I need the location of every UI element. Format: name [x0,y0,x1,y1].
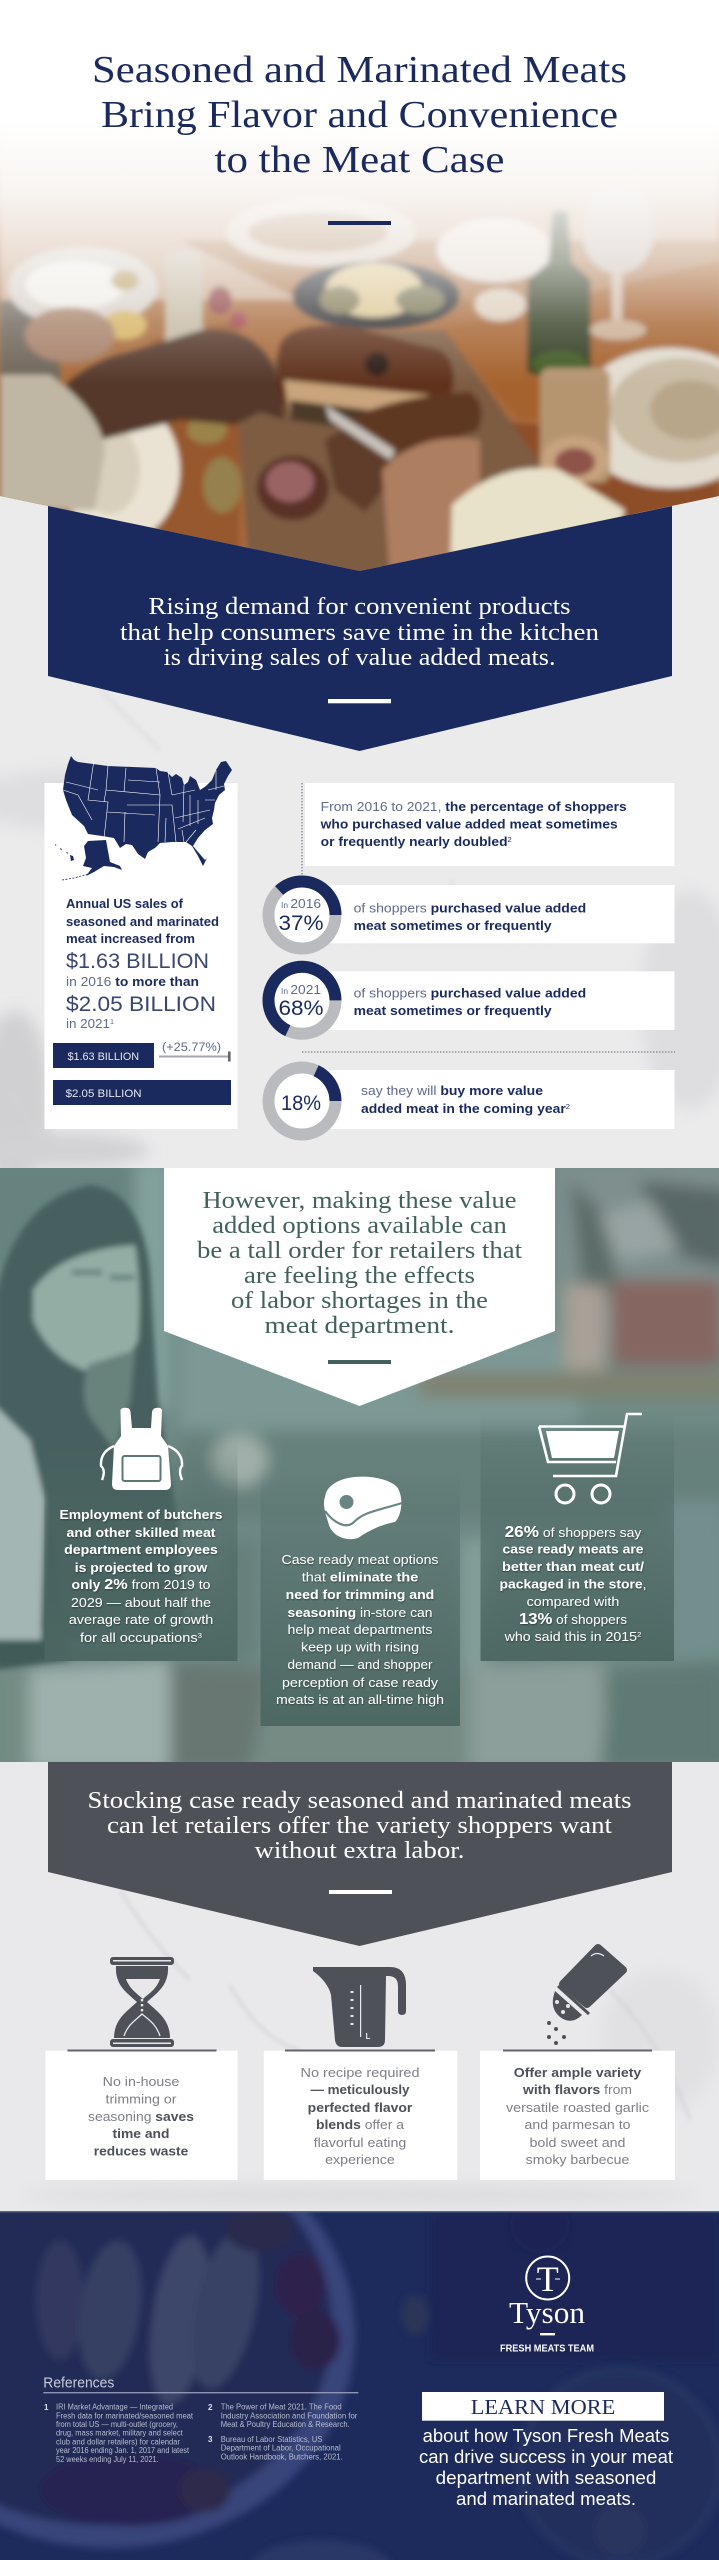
text: call to action [419,2426,673,2509]
panel: nearly doubled callout: 2 [508,837,512,844]
panel: no recipe required [264,1967,457,2180]
text: employment stat: department employees [64,1542,218,1557]
text: case ready: meats is at an all-time high [276,1692,444,1707]
references: club and dollar retailers) for calendar [56,2437,180,2446]
text: call to action: about how Tyson Fresh Meats [423,2426,669,2446]
text: employment stat: is projected to grow [75,1560,208,1575]
icon: steak [324,1477,402,1539]
roast 2 [350,392,482,455]
text: variety: smoky barbecue [526,2152,629,2167]
panel: 2016 stat 37%: of shoppers purchased value added [354,900,586,916]
text: annual sales: $1.63 BILLION [66,950,209,973]
panel: 18% stat [257,1056,674,1146]
references: Bureau of Labor Statistics, US [221,2435,322,2444]
text: flavor blends: flavorful eating [314,2135,406,2150]
panel: labor shortages chevron: be a tall order for retailers that [197,1237,522,1264]
references: Meat & Poultry Education & Research. [221,2420,350,2429]
panel: nearly doubled callout: who purchased value added meat sometimes [320,816,618,832]
panel: labor shortages chevron: of labor shortages in the [231,1287,488,1314]
donut: 37%: In 2016 [281,896,321,911]
icon: seasoning shaker [547,1948,623,2045]
text: annual sales [66,897,219,1031]
references: IRI Market Advantage — Integrated [56,2403,173,2412]
panel: 18% stat: say they will buy more value [361,1083,543,1098]
text: saves time: trimming or [106,2092,177,2106]
text: annual sales: $2.05 BILLION [66,993,216,1016]
panel: no in-house trimming [45,1957,238,2180]
panel: annual sales card [44,756,238,1129]
panel: 2021 stat 68%: of shoppers purchased value added [354,986,586,1000]
spoons [187,416,227,444]
text: shopper perception: 13% of shoppers [519,1611,628,1628]
panel: stocking chevron: without extra labor. [254,1837,464,1864]
icon: shopping cart [539,1414,642,1503]
upper dishes [228,211,414,270]
text: case ready: keep up with rising [301,1640,419,1654]
panel: labor shortages chevron [164,1168,555,1406]
text: employment stat: 3 [198,1633,202,1640]
text: saves time [88,2074,194,2158]
bar chart: sales comparison [53,1042,231,1105]
references: The Power of Meat 2021. The Food [221,2403,342,2412]
text: annual sales: Annual US sales of [66,897,184,911]
section: marble background upper [0,490,719,1190]
wine glass [582,225,654,276]
references: Outlook Handbook, Butchers, 2021. [221,2452,343,2461]
text: call to action: department with seasoned [436,2468,656,2488]
text: saves time: reduces waste [94,2144,188,2158]
panel: 18% stat: added meat in the coming year [361,1101,552,1116]
text: call to action: can drive success in your meat [419,2447,673,2467]
text: employment stat: average rate of growth [69,1612,213,1627]
bar chart: sales comparison: $2.05 BILLION [66,1088,142,1100]
sleeve [0,375,105,510]
section: marble background lower [0,1762,719,2212]
cutting board [238,330,545,580]
panel: ample variety [480,1948,675,2180]
panel: 18% stat: 2 [566,1104,570,1111]
text: shopper perception [500,1524,647,1644]
text: flavor blends: experience [325,2152,395,2167]
panel: labor shortages chevron: However, making these value [202,1187,517,1214]
donut: 18% [257,1056,347,1146]
text: shopper perception: who said this in 2015 [505,1629,626,1644]
left plate [68,418,186,530]
panel: case ready card [260,1467,460,1726]
panel: 2016 stat 37%: meat sometimes or frequently [354,918,552,933]
roast 1 [277,325,454,418]
donut: 68%: 68% [278,997,324,1020]
references: drug, mass market, military and select [56,2429,183,2438]
text: annual sales: seasoned and marinated [66,915,219,929]
bar chart: sales comparison: (+25.77%) [162,1042,221,1054]
bar chart: sales comparison: $1.63 BILLION [68,1051,139,1063]
text: variety: with flavors from [522,2082,632,2097]
panel: rising demand chevron: Rising demand for convenient products [148,593,570,620]
logo: Tyson Fresh Meats Team: FRESH MEATS TEAM [500,2344,594,2355]
panel: shopper perception card [480,1410,674,1661]
icon: apron [101,1408,182,1490]
section: navy footer with dark food photo [0,2211,719,2560]
text: employment stat: Employment of butchers [60,1507,222,1522]
text: shopper perception: compared with [527,1594,619,1609]
panel: rising demand chevron: is driving sales of value added meats. [164,644,556,671]
button: learn more: LEARN MORE [471,2395,615,2419]
panel: labor shortages chevron: added options available can [212,1212,507,1239]
icon: measuring jug [313,1967,406,2047]
icon: hourglass [110,1957,174,2047]
text: annual sales: in 2021 [66,1016,109,1031]
title: Bring Flavor and Convenience [101,94,618,136]
text: employment stat: 2029 — about half the [71,1595,211,1610]
panel: nearly doubled callout: From 2016 to 2021, the percentage of shoppers [321,799,627,814]
text: variety: versatile roasted garlic [506,2100,650,2115]
text: saves time: seasoning saves [88,2109,194,2124]
donut: 18%: 18% [281,1092,321,1115]
text: variety [506,2065,650,2167]
text: saves time: No in-house [103,2074,179,2089]
references [43,2375,358,2464]
panel: labor shortages chevron: meat department. [264,1312,454,1339]
text: case ready: perception of case ready [282,1675,439,1690]
text: case ready: demand — and shopper [288,1657,433,1672]
panel: stocking chevron: can let retailers offer the variety shoppers want [107,1812,612,1839]
text: employment stat [60,1507,222,1645]
text: annual sales: in 2016 to more than [66,974,199,989]
references: 3 [208,2435,213,2444]
references: Industry Association and Foundation for [221,2411,358,2420]
text: flavor blends: blends offer a [316,2117,405,2132]
panel: 2021 stat 68% [257,956,674,1045]
panel: labor shortages chevron: are feeling the effects [244,1262,475,1289]
beer glass [540,368,610,483]
text: case ready: seasoning in-store can [288,1605,432,1620]
green bottle [527,210,591,378]
text: annual sales: meat increased from [66,932,195,946]
text: variety: bold sweet and [530,2135,626,2150]
cast iron pan [292,261,460,329]
hand and arm [60,330,285,440]
donut: 68%: In 2021 [281,982,321,997]
text: shopper perception: 2 [637,1632,641,1639]
text: case ready [276,1552,444,1707]
text: shopper perception: packaged in the store , [500,1576,647,1592]
title: to the Meat Case [214,139,504,181]
text: employment stat: and other skilled meat [66,1525,216,1540]
text: flavor blends [300,2065,420,2167]
donut: 37% [255,868,349,962]
text: shopper perception: better than meat cut/ [502,1559,644,1574]
panel: 2016 stat 37% [255,868,674,962]
text: case ready: Case ready meat options [282,1552,439,1567]
panel: rising demand chevron: that help consumers save time in the kitchen [120,619,599,646]
references: year 2016 ending Jan. 1, 2017 and latest [56,2446,190,2455]
right plate [600,342,719,494]
references: 1 [44,2403,49,2412]
text: variety: Offer ample variety [514,2065,642,2080]
text: variety: and parmesan to [524,2117,630,2132]
donut: 37%: 37% [278,912,324,935]
hero photo of carved roast on dinner table [0,155,719,571]
white fade over top of photo [0,0,719,385]
text: annual sales: 1 [110,1019,114,1026]
text: flavor blends: No recipe required [300,2065,420,2080]
panel: nearly doubled callout: or frequently nearly doubled [321,834,496,849]
text: shopper perception: case ready meats are [502,1542,644,1556]
references: from total US — multi-outlet (grocery, [56,2420,178,2429]
text: employment stat: only 2% from 2019 to [72,1576,210,1593]
text: shopper perception: 26% of shoppers say [505,1524,642,1541]
logo: Tyson Fresh Meats Team: Tyson [509,2295,585,2330]
title: Seasoned and Marinated Meats [92,49,627,91]
title [92,49,627,225]
text: case ready: that eliminate the [302,1570,418,1584]
text: flavor blends: perfected flavor [308,2100,412,2115]
steak slices [257,456,329,520]
text: flavor blends: — meticulously [310,2082,410,2097]
text: call to action: and marinated meats. [456,2489,636,2509]
logo: Tyson Fresh Meats Team: T [537,2259,559,2299]
divider: dotted timeline [302,783,675,1052]
panel: nearly doubled callout [305,783,674,866]
panel: stocking chevron: Stocking case ready seasoned and marinated meats [88,1787,632,1814]
panel: employment card [44,1408,238,1661]
references: References [43,2375,114,2392]
right foreground hand and sleeve [382,438,480,580]
donut: 68% [257,956,347,1045]
references: 52 weeks ending July 11, 2021. [56,2455,159,2464]
references: Fresh data for marinated/seasoned meat [56,2411,194,2420]
button: learn more [422,2392,664,2421]
references: 2 [208,2403,213,2412]
panel: rising demand chevron [48,506,672,751]
text: case ready: need for trimming and [286,1587,434,1602]
references: Department of Labor, Occupational [221,2444,341,2453]
panel: 2021 stat 68%: meat sometimes or frequently [354,1003,552,1018]
panel: stocking chevron [48,1762,672,1946]
woman in foreground [0,1185,185,1670]
icon: US map [55,756,232,880]
logo: Tyson Fresh Meats Team [500,2256,594,2355]
text: employment stat: for all occupations [80,1630,185,1645]
text: case ready: help meat departments [288,1622,433,1637]
section: teal store photo background [0,1160,719,1775]
icon: measuring jug: L [366,2032,370,2041]
text: saves time: time and [112,2126,170,2141]
